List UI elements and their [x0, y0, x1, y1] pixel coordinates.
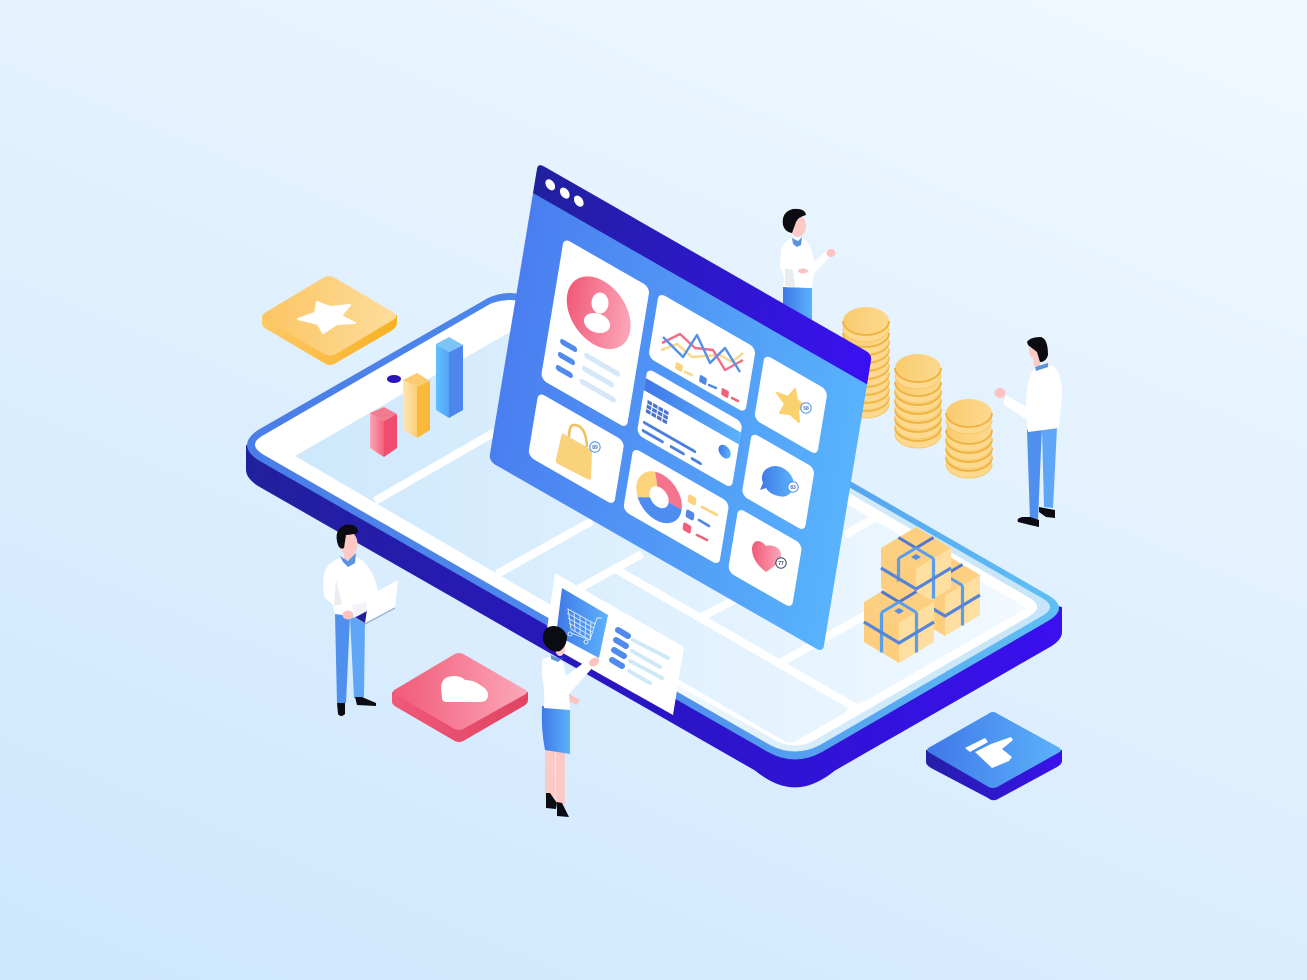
man legs: [1027, 427, 1057, 520]
woman skirt: [542, 706, 570, 754]
bar chart: three isometric bars: [370, 337, 463, 457]
icon tile: thumbs up: [926, 712, 1062, 800]
coin stack: middle: [895, 354, 941, 448]
phone blue rim: [247, 293, 1059, 760]
icon tile: star: [262, 276, 397, 365]
icon: heart with badge: [752, 541, 786, 572]
card: chat: [741, 432, 815, 531]
parcel: top: [881, 527, 951, 609]
icon: heart with badge: 77: [778, 561, 784, 567]
card: shopping bag: [528, 392, 625, 505]
cart screen: [556, 588, 608, 658]
laptop: [352, 580, 398, 624]
phone side edge: [246, 445, 1062, 787]
card: donut chart: [623, 447, 729, 565]
table status dot: [718, 442, 732, 461]
stacked parcels: [864, 527, 980, 663]
icon: profile person: [581, 292, 613, 337]
card list lines: [629, 640, 668, 683]
line chart series: [661, 334, 743, 372]
dot marker: [387, 375, 401, 383]
line chart legend: [675, 361, 738, 401]
bar: yellow: [403, 373, 430, 438]
profile avatar disc: [562, 263, 635, 362]
window control dots: [545, 177, 584, 209]
profile text lines: [555, 338, 621, 404]
man collar: [1035, 363, 1048, 371]
icon: chat bubble with badge: [760, 466, 798, 497]
woman head: [543, 626, 567, 656]
man head: [1027, 337, 1048, 366]
bar: red: [370, 407, 397, 457]
laptop man shirt: [323, 557, 380, 618]
parcel: right: [910, 554, 980, 636]
person: man facing coins: [994, 337, 1062, 527]
woman collar: [551, 655, 564, 662]
coin stack: front: [946, 399, 992, 478]
icon: chat bubble with badge: 83: [790, 485, 796, 491]
floating cart card: [545, 573, 684, 715]
window title bar: [533, 163, 872, 384]
icon: shopping bag with badge: 89: [592, 445, 598, 451]
bar: blue: [436, 337, 463, 418]
dashboard window panel: [489, 163, 872, 652]
card: heart: [728, 508, 802, 608]
card: line chart background: [648, 292, 756, 413]
screen roads: [375, 432, 878, 714]
phone platform: [246, 293, 1062, 787]
phone pale inner band: [255, 300, 1050, 752]
icon: shopping cart: [567, 609, 602, 644]
shirt shade: [334, 580, 342, 606]
thumb glyph: [965, 737, 1013, 768]
laptop man shoes: [337, 697, 376, 716]
person: woman touching cart screen: [542, 626, 601, 817]
laptop man head: [337, 525, 358, 560]
phone white bezel: [257, 304, 1037, 746]
table text lines: [641, 420, 703, 466]
woman legs: [545, 748, 565, 804]
window body: [489, 163, 872, 652]
laptop man legs: [335, 613, 365, 704]
card: star review: [754, 354, 828, 455]
coin stack: back: [843, 307, 889, 418]
person: man with laptop: [323, 525, 398, 716]
card list bullets: [612, 630, 628, 666]
icon: star with badge: 58: [803, 406, 809, 412]
man shoes: [1018, 507, 1055, 527]
man hand: [994, 388, 1006, 398]
card: table: [637, 368, 743, 488]
icon: shopping bag with badge: [556, 425, 600, 480]
parcel: front: [864, 581, 934, 663]
woman blouse: [542, 657, 594, 710]
table header band: [644, 378, 741, 444]
cart card sheet: [545, 573, 684, 715]
laptop man collar: [340, 553, 356, 567]
calendar grid: [646, 400, 669, 424]
phone screen: [295, 321, 1027, 742]
man shirt and arm: [1003, 366, 1062, 432]
donut chart legend: [682, 494, 717, 540]
icon: star with badge: [777, 389, 811, 422]
person: woman behind the window: [780, 209, 836, 322]
woman lower hand: [566, 692, 580, 705]
laptop man hand: [342, 610, 354, 620]
donut chart rings: [640, 472, 678, 522]
woman raised hand: [587, 656, 601, 668]
icon tile: heart: [392, 653, 528, 742]
woman shoes: [546, 793, 569, 817]
card: profile: [541, 238, 650, 428]
